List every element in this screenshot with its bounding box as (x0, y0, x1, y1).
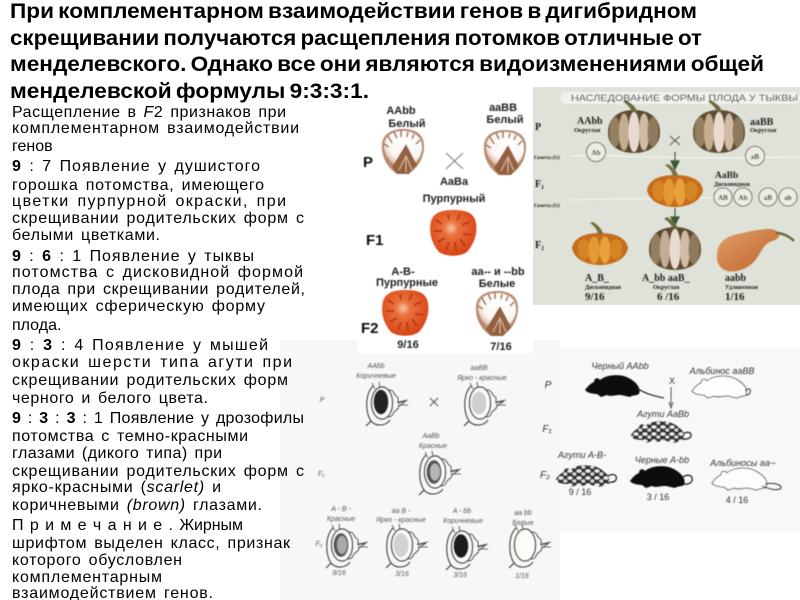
F2 eyes with ratios: F₂ (316, 541, 323, 548)
F2 eyes with ratios: 3/16 (395, 571, 409, 578)
pumpkins F2 with ratios: Округлая (653, 285, 680, 291)
parents: black and albino mice: Альбинос ааВВ (689, 366, 754, 376)
F1 purple flower: F1 (366, 232, 384, 249)
panel: sweet pea flowers (358, 100, 533, 353)
pumpkins F2 with ratios: 9/16 (585, 291, 605, 303)
text block: ratios description: 9 : 3 : 3 : 1 Появление у дрозофилы (12, 410, 304, 427)
title (10, 0, 764, 103)
pumpkins F2 with ratios: Дисковидная (585, 285, 622, 291)
panel heading: НАСЛЕДОВАНИЕ ФОРМЫ ПЛОДА У ТЫКВЫ (571, 93, 798, 104)
P generation white flowers: Белый (388, 118, 426, 130)
F1 eye: F₁ (318, 471, 325, 478)
P generation eyes: Коричневые (356, 373, 396, 380)
pumpkins F2 with ratios: Удлиненная (725, 285, 759, 291)
text block: ratios description: горошка потомства, имеющего (12, 177, 264, 194)
F2 mice with ratios: Агути А-В- (557, 450, 606, 460)
elongated squash (717, 229, 779, 271)
F2 eyes with ratios: Белые (512, 520, 534, 527)
pumpkins row P: AAbb (577, 116, 603, 127)
pumpkins F2 with ratios: aabb (725, 273, 747, 284)
generation labels: F₂ (540, 470, 550, 481)
text block: ratios description: потомства с дисковидной формой (12, 264, 303, 281)
F1 eye (318, 433, 461, 495)
F2 eyes with ratios: aa B - (392, 508, 411, 515)
text block: ratios description: окраски шерсти типа агути при (12, 354, 292, 371)
parents: black and albino mice: Черный ААbb (591, 361, 649, 371)
F1 agouti mouse (630, 409, 691, 443)
P generation white flowers: AAbb (386, 105, 416, 117)
parents: black and albino mice: X (669, 376, 675, 386)
parents: black and albino mice (585, 361, 754, 408)
title: менделевской формулы 9:3:3:1. (10, 79, 369, 103)
generation labels (534, 122, 560, 251)
F2 flowers with ratios: aa-- и --bb (471, 266, 525, 278)
pumpkin F1 with gametes: AB (718, 194, 728, 202)
pumpkin F1 with gametes: Ab (739, 194, 748, 202)
pumpkins row P: Ab (592, 149, 601, 157)
pumpkins row P: aB (751, 153, 759, 161)
text block: ratios description: шрифтом выделен класс, признак (12, 535, 291, 552)
F2 eyes with ratios: A - B - (330, 506, 351, 513)
panel: mice coat colour (540, 347, 800, 533)
F2 flowers with ratios: 9/16 (397, 339, 419, 351)
P generation eyes: AAbb (366, 363, 385, 370)
text block: ratios description: комплементарном взаимодействии (12, 120, 299, 137)
pumpkins row P: Округлая (750, 128, 777, 134)
text block: ratios description (12, 104, 305, 600)
text block: ratios description: скрещивании родительских форм с (12, 463, 304, 480)
text block: ratios description: коричневыми (brown) глазами. (12, 497, 262, 514)
F1 agouti mouse: Агути АаВb (636, 409, 689, 419)
text block: ratios description: 9 : 7 Появление у душистого (12, 158, 260, 175)
text block: ratios description: 9 : 3 : 4 Появление у мышей (12, 337, 268, 354)
generation labels: Гаметы (G) (534, 156, 560, 161)
generation labels: F₂ (535, 240, 544, 251)
P generation eyes (320, 363, 507, 426)
text block: ratios description: скрещивании родительских форм (12, 372, 288, 389)
text block: ratios description: глазами (дикого типа) при (12, 445, 222, 462)
P generation white flowers (363, 102, 526, 175)
P generation white flowers: Белый (486, 114, 524, 126)
P generation eyes: aaBB (470, 365, 488, 372)
pumpkin F1 with gametes: aB (764, 194, 772, 202)
F2 eyes with ratios: 3/16 (453, 572, 467, 579)
text block: ratios description: плода. (12, 317, 61, 334)
panel: drosophila eyes (280, 340, 560, 600)
pumpkins F2 with ratios: A_B_ (585, 273, 610, 284)
pumpkin F1 with gametes: AaBb (715, 171, 738, 181)
text block: ratios description: скрещивании родительских форм с (12, 210, 304, 227)
F1 purple flower: AaBa (440, 176, 469, 188)
panel: pumpkin inheritance (533, 87, 800, 305)
F2 eyes with ratios: Ярко - красные (375, 517, 426, 524)
pumpkin F1 with gametes: ab (784, 194, 792, 202)
generation labels (540, 380, 552, 481)
F2 eyes with ratios: Коричневые (443, 518, 483, 525)
P generation white flowers: aaBB (489, 102, 517, 114)
text block: ratios description: которого обусловлен (12, 552, 182, 569)
F2 mice with ratios (555, 450, 781, 505)
F2 mice with ratios: Альбиносы аа-- (709, 458, 776, 468)
P generation white flowers: P (363, 154, 373, 171)
pumpkins row P: aaBB (750, 117, 774, 128)
F2 eyes with ratios: A - bb (452, 508, 471, 515)
arrow F1 to F2 (671, 208, 679, 225)
pumpkin F1 with gametes (647, 164, 797, 207)
pumpkins row P (574, 100, 777, 166)
text block: ratios description: комплементарным (12, 569, 162, 586)
generation labels: F₁ (542, 424, 552, 435)
text block: ratios description: белыми цветками. (12, 227, 160, 244)
F1 eye: AaBb (421, 433, 440, 440)
text block: ratios description: ярко-красными (scarlet) и (12, 479, 221, 496)
F2 eyes with ratios: aa bb (514, 510, 532, 517)
F2 eyes with ratios: Красные (327, 516, 355, 523)
F2 mice with ratios: 3 / 16 (647, 492, 669, 502)
text block: ratios description: потомства с темно-красными (12, 428, 248, 445)
F2 eyes with ratios (316, 506, 551, 580)
generation labels: Гаметы (G) (534, 204, 560, 209)
F1 purple flower: Пурпурный (423, 193, 485, 205)
F2 flowers with ratios: Пурпурные (376, 277, 438, 289)
F1 eye: Красные (419, 443, 447, 450)
F2 flowers with ratios (361, 266, 525, 353)
text block: ratios description: плода при скрещивании родителей, (12, 281, 305, 298)
generation labels: P (545, 380, 552, 391)
text block: ratios description: цветки пурпурной окраски, при (12, 193, 286, 210)
pumpkins row P: Округлая (574, 128, 601, 134)
pumpkins F2 with ratios: A_bb aaB_ (642, 273, 691, 284)
F2 mice with ratios: 4 / 16 (726, 495, 748, 505)
text block: ratios description: П р и м е ч а н и е . Жирным (12, 517, 243, 534)
text block: ratios description: 9 : 6 : 1 Появление у тыквы (12, 248, 254, 265)
pumpkin F1 with gametes: Дисковидная (714, 182, 751, 188)
F1 purple flower (366, 176, 485, 256)
F2 flowers with ratios: A-B- (391, 266, 415, 278)
arrow P to F1 (671, 152, 679, 169)
F2 mice with ratios: 9 / 16 (569, 487, 591, 497)
title: менделевского. Однако все они являются видоизменениями общей (10, 52, 764, 76)
F2 flowers with ratios: Белые (479, 278, 515, 290)
pumpkins F2 with ratios: 1/16 (725, 291, 745, 303)
generation labels: P (535, 122, 541, 133)
F2 eyes with ratios: 1/16 (515, 573, 529, 580)
P generation eyes: P (320, 397, 325, 404)
generation labels: F₁ (535, 179, 544, 190)
pumpkins F2 with ratios: 6 /16 (657, 291, 680, 303)
pumpkins F2 with ratios (572, 217, 794, 303)
F2 flowers with ratios: 7/16 (490, 341, 512, 353)
F2 mice with ratios: Черные А-bb (635, 455, 689, 465)
text block: ratios description: имеющих сферическую форму (12, 298, 265, 315)
F2 flowers with ratios: F2 (361, 320, 379, 337)
P generation eyes: Ярко - красные (456, 375, 507, 382)
title: скрещивании получаются расщепления потомков отличные от (10, 26, 702, 50)
text block: ratios description: черного и белого цвета. (12, 390, 208, 407)
text block: ratios description: Расщепление в F2 признаков при (12, 104, 286, 121)
F2 eyes with ratios: 9/16 (332, 570, 346, 577)
text block: ratios description: генов (12, 138, 53, 155)
